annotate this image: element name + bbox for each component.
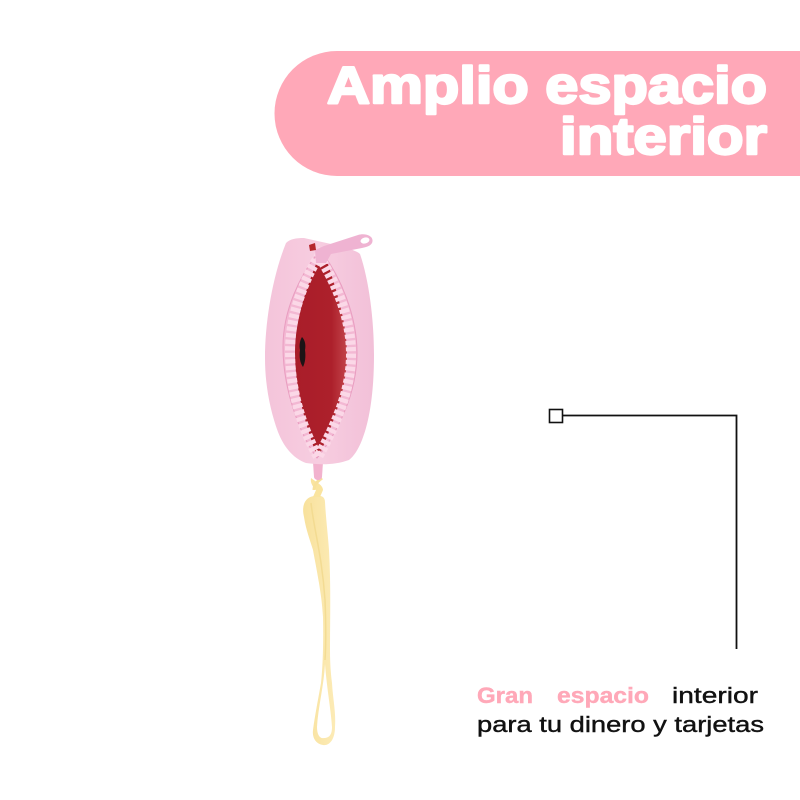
title text: Amplio espacio bbox=[327, 57, 767, 115]
purse body bbox=[265, 238, 374, 464]
callout leader line bbox=[550, 410, 736, 649]
title text: interior bbox=[560, 108, 767, 166]
yellow wrist strap bbox=[303, 478, 335, 745]
red interior bbox=[295, 264, 347, 454]
elbow line bbox=[563, 416, 736, 649]
title text bbox=[327, 57, 767, 166]
caption line two: para tu dinero y tarjetas bbox=[477, 712, 764, 737]
caption text bbox=[477, 683, 764, 737]
banner pill bbox=[274, 51, 800, 176]
caption line one: interior bbox=[672, 683, 758, 708]
square marker bbox=[550, 410, 562, 422]
zipper tape bbox=[283, 250, 357, 458]
caption line one: espacio bbox=[557, 683, 649, 708]
caption line one: Gran bbox=[477, 683, 533, 708]
zipper pull bbox=[309, 234, 373, 263]
zipper teeth bbox=[290, 256, 351, 457]
product photo: silicone coin purse bbox=[265, 234, 374, 745]
pink strap connector bbox=[313, 462, 323, 480]
title banner bbox=[274, 51, 800, 176]
black charm inside bbox=[300, 337, 305, 367]
caption line one bbox=[477, 683, 758, 708]
